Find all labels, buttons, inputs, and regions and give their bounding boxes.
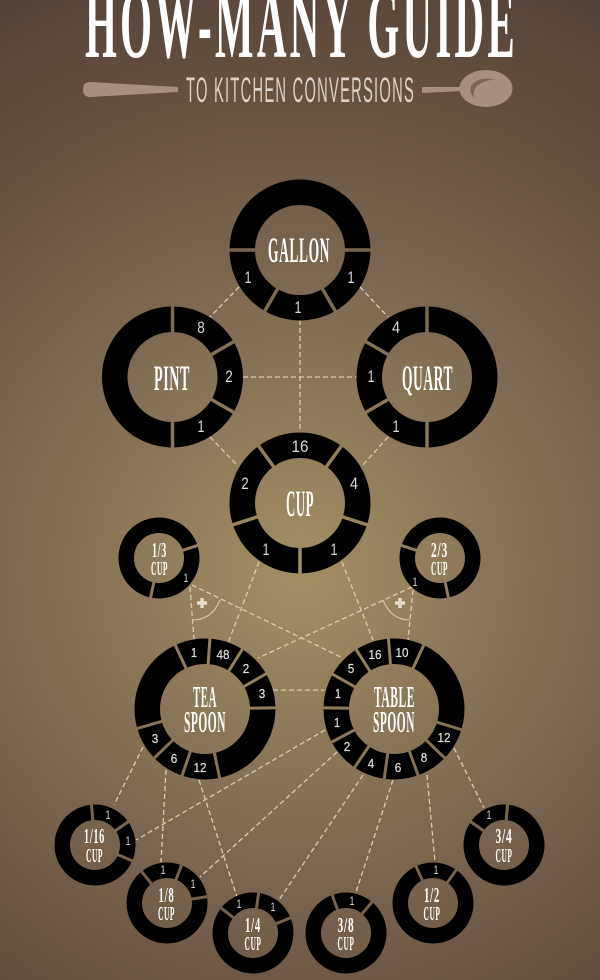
- ring: pint: 8: [197, 319, 205, 337]
- ring: gallon: 1: [348, 269, 354, 287]
- ring: tablespoon: 6: [395, 760, 401, 775]
- ring: tablespoon: 1: [334, 715, 340, 730]
- ring: 1/3 cup: 1: [184, 573, 188, 585]
- ring: cup: 16: [292, 438, 308, 456]
- ring: tablespoon: [334, 645, 452, 775]
- ring: cup: 1: [330, 541, 338, 559]
- ring: teaspoon: SPOON: [184, 704, 226, 739]
- ring: tablespoon: 1: [335, 686, 341, 701]
- ring: cup: 2: [241, 475, 249, 493]
- ring: quart: QUART: [402, 358, 453, 398]
- ring: 3/8 cup: [313, 896, 379, 966]
- ring: tablespoon: 4: [368, 756, 374, 771]
- icon: spoon handle left: [83, 82, 178, 97]
- ring: teaspoon: 1: [191, 645, 197, 660]
- ring: 3/4 cup: 1: [486, 810, 492, 822]
- ring: pint: [115, 319, 233, 436]
- ring: tablespoon: SPOON: [373, 704, 415, 739]
- ring: tablespoon: 16: [368, 647, 382, 662]
- ring: 1/2 cup: 1: [434, 865, 438, 877]
- ring: 1/4 cup: [220, 899, 286, 966]
- ring: 1/3 cup: 1/3: [152, 538, 167, 562]
- ring: 1/16 cup: 1: [126, 836, 130, 848]
- ring: 3/4 cup: 3/4: [496, 824, 512, 848]
- ring: tablespoon: TABLE: [374, 679, 415, 714]
- ring: 1/16 cup: CUP: [86, 845, 103, 867]
- ring: 1/8 cup: 1: [160, 865, 166, 877]
- ring: teaspoon: 6: [171, 751, 177, 766]
- ring: 1/2 cup: [400, 865, 466, 936]
- ring: 3/4 cup: [471, 810, 537, 878]
- ring: teaspoon: 48: [216, 647, 230, 662]
- ring: 1/16 cup: [62, 810, 130, 878]
- plus marker left: [192, 598, 220, 620]
- ring: quart: 4: [392, 319, 400, 337]
- ring: gallon: 1: [294, 299, 302, 317]
- ring: 1/4 cup: 1: [236, 899, 242, 911]
- ring: teaspoon: [147, 645, 265, 775]
- ring: 1/8 cup: 1: [190, 879, 196, 891]
- ring: 1/4 cup: CUP: [244, 933, 262, 955]
- ring: teaspoon: TEA: [193, 679, 217, 714]
- ring: 3/4 cup: CUP: [496, 845, 512, 867]
- ring: 2/3 cup: [407, 525, 473, 591]
- ring: cup: CUP: [286, 484, 314, 525]
- ring: gallon: GALLON: [268, 230, 330, 270]
- ring: tablespoon: 12: [438, 730, 450, 745]
- ring: teaspoon: 3: [152, 731, 158, 746]
- ring: gallon: 1: [244, 269, 252, 287]
- ring: pint: PINT: [154, 358, 190, 398]
- ring: teaspoon: 12: [194, 760, 206, 775]
- plus marker right: [383, 598, 410, 620]
- ring: 2/3 cup: 2/3: [431, 538, 448, 562]
- ring: tablespoon: 8: [421, 750, 427, 765]
- ring: 2/3 cup: CUP: [431, 558, 448, 580]
- ring: 1/3 cup: CUP: [151, 558, 168, 580]
- ring: 1/4 cup: 1: [270, 902, 276, 914]
- ring: tablespoon: 5: [348, 661, 354, 676]
- ring: 1/16 cup: 1: [106, 810, 110, 822]
- ring: gallon: [242, 192, 358, 317]
- ring: 1/2 cup: CUP: [424, 903, 440, 925]
- ring: quart: [368, 319, 485, 436]
- ring: 1/8 cup: 1/8: [158, 883, 174, 907]
- ring: cup: 1: [262, 541, 270, 559]
- ring: 1/8 cup: CUP: [158, 903, 175, 925]
- icon: spoon bowl right: [422, 70, 512, 107]
- ring: 1/2 cup: 1/2: [424, 883, 440, 907]
- ring: cup: 4: [350, 475, 358, 493]
- ring: 3/8 cup: CUP: [338, 933, 354, 955]
- ring: 2/3 cup: 1: [412, 577, 418, 589]
- ring: tablespoon: 10: [396, 645, 408, 660]
- ring: tablespoon: 2: [344, 739, 350, 754]
- ring: pint: 1: [198, 418, 204, 436]
- ring: 1/8 cup: [134, 865, 200, 936]
- ring: teaspoon: 3: [259, 686, 265, 701]
- ring: quart: 1: [368, 368, 374, 386]
- ring: 1/3 cup: [126, 525, 192, 591]
- ring: 3/8 cup: 3/8: [338, 913, 354, 937]
- ring: teaspoon: 2: [243, 661, 249, 676]
- ring: 3/8 cup: 1: [350, 896, 354, 908]
- ring: 1/16 cup: 1/16: [84, 824, 105, 848]
- ring: quart: 1: [392, 418, 400, 436]
- connector lines: [114, 287, 484, 900]
- ring: cup: [241, 438, 358, 561]
- ring: 1/4 cup: 1/4: [245, 913, 261, 937]
- ring: pint: 2: [225, 368, 233, 386]
